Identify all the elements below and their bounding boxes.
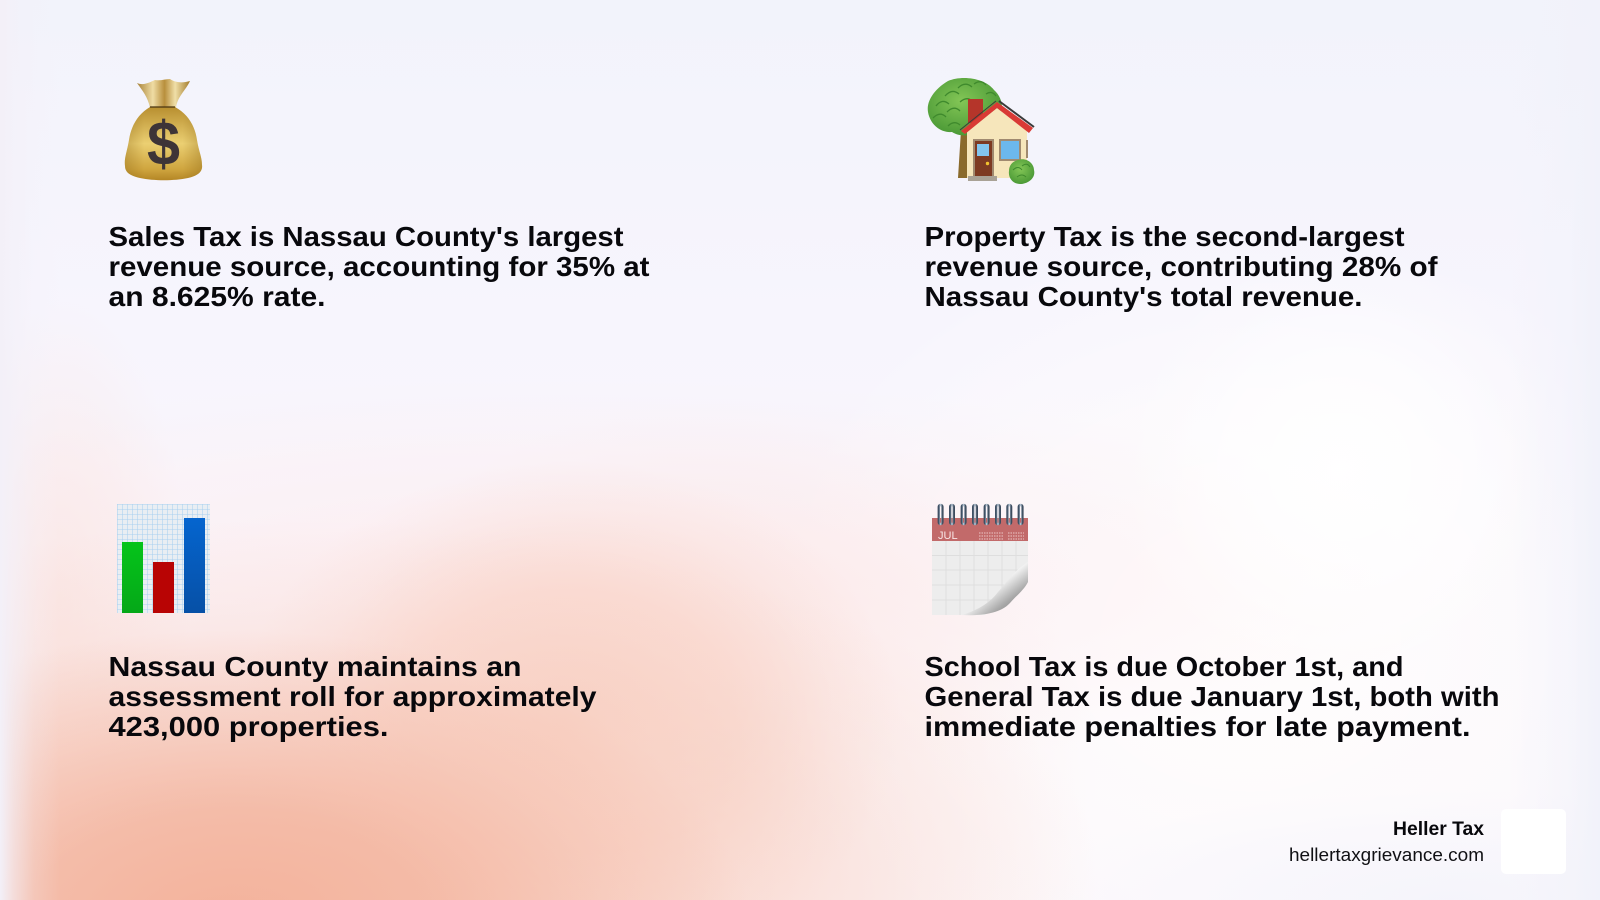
icon: calendar: JUL <box>938 530 958 542</box>
text: due dates fact <box>924 651 1500 742</box>
text: sales tax fact <box>108 221 650 312</box>
text: due dates fact: General Tax is due January 1st, both with <box>924 681 1500 712</box>
brand name: Heller Tax <box>1393 819 1484 840</box>
icon: money bag: $ <box>147 110 180 179</box>
text: property tax fact <box>924 221 1438 312</box>
text: sales tax fact: Sales Tax is Nassau County's largest <box>108 221 624 252</box>
text: property tax fact: revenue source, contributing 28% of <box>924 251 1438 282</box>
icon: bar chart <box>117 504 210 613</box>
panel: sales tax <box>108 79 650 312</box>
text: sales tax fact: an 8.625% rate. <box>108 281 326 312</box>
logo placeholder <box>1501 809 1566 874</box>
panel: due dates <box>924 505 1500 742</box>
panel: property tax <box>924 78 1438 312</box>
panel: assessment roll <box>108 504 597 742</box>
text: assessment roll fact: assessment roll for approximately <box>108 681 597 712</box>
text: assessment roll fact: Nassau County maintains an <box>108 651 522 682</box>
icon: calendar <box>932 505 1028 615</box>
text: property tax fact: Nassau County's total revenue. <box>924 281 1362 312</box>
footer branding <box>1289 809 1566 874</box>
text: assessment roll fact <box>108 651 597 742</box>
website: hellertaxgrievance.com <box>1289 845 1484 865</box>
text: assessment roll fact: 423,000 properties. <box>108 711 388 742</box>
text: due dates fact: School Tax is due October 1st, and <box>924 651 1404 682</box>
icon: money bag <box>125 79 202 180</box>
text: property tax fact: Property Tax is the second-largest <box>924 221 1404 252</box>
text: due dates fact: immediate penalties for late payment. <box>924 711 1470 742</box>
icon: house with tree <box>928 78 1034 184</box>
text: sales tax fact: revenue source, accounting for 35% at <box>108 251 650 282</box>
